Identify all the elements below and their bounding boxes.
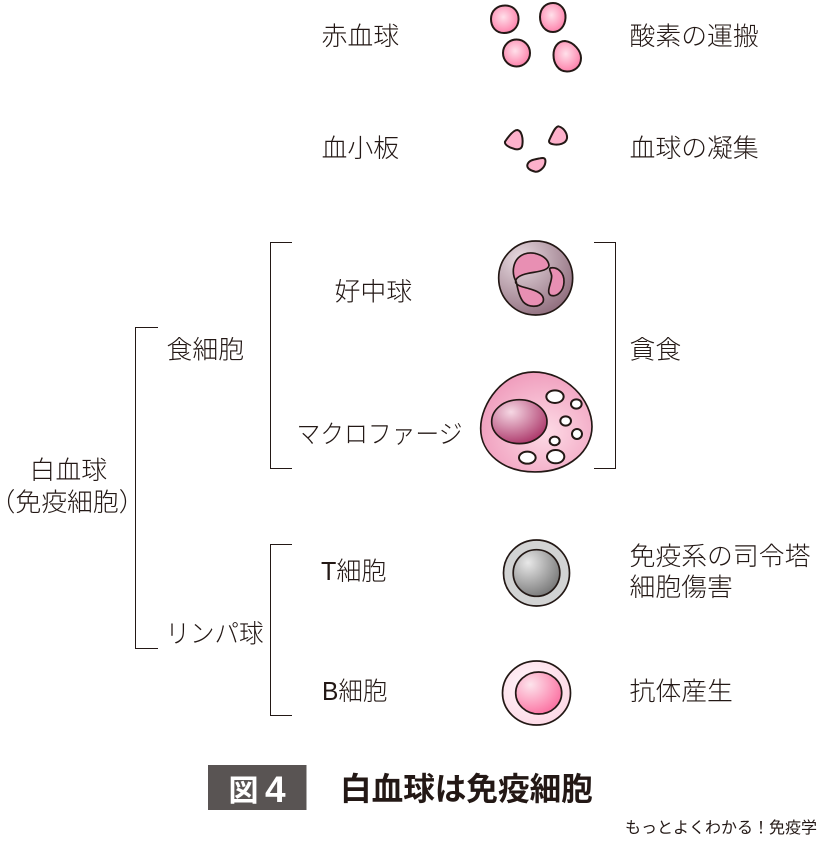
function: T cell roles	[630, 542, 811, 602]
function: oxygen transport: 酸素の運搬	[630, 22, 759, 51]
label: macrophage: マクロファージ	[296, 421, 462, 449]
icon: neutrophil	[499, 241, 573, 315]
bracket: white blood cells	[136, 328, 158, 648]
bracket: phagocytes	[270, 242, 292, 468]
icon: T cell	[504, 540, 570, 606]
function: T cell roles: 免疫系の司令塔	[630, 542, 811, 571]
icon: red blood cells	[491, 3, 581, 72]
label: B cell: B細胞	[322, 677, 388, 706]
icon: macrophage	[481, 372, 592, 472]
icon: platelets	[505, 126, 567, 172]
label: phagocytes: 食細胞	[166, 336, 244, 364]
function: blood clotting: 血球の凝集	[630, 134, 759, 163]
label: white blood cells: 白血球	[30, 456, 107, 485]
row: platelets label: 血小板	[322, 134, 399, 163]
label: T cell: T細胞	[321, 557, 386, 586]
bracket: lymphocytes	[270, 544, 292, 716]
icon: B cell	[502, 661, 570, 725]
label: white blood cells	[0, 456, 145, 517]
source credit: もっとよくわかる！免疫学	[625, 819, 817, 837]
bracket: phagocytosis	[594, 242, 616, 468]
function: phagocytosis: 貪食	[630, 336, 681, 364]
label: neutrophil: 好中球	[334, 278, 412, 306]
figure number badge: 4	[265, 769, 286, 810]
figure number badge	[208, 765, 306, 810]
function: T cell roles: 細胞傷害	[630, 573, 733, 602]
figure number badge: 図	[228, 775, 258, 808]
label: lymphocytes: リンパ球	[166, 620, 264, 648]
figure title: 白血球は免疫細胞	[340, 771, 593, 807]
function: antibody production: 抗体産生	[630, 677, 733, 706]
row: red blood cells label: 赤血球	[322, 22, 399, 51]
